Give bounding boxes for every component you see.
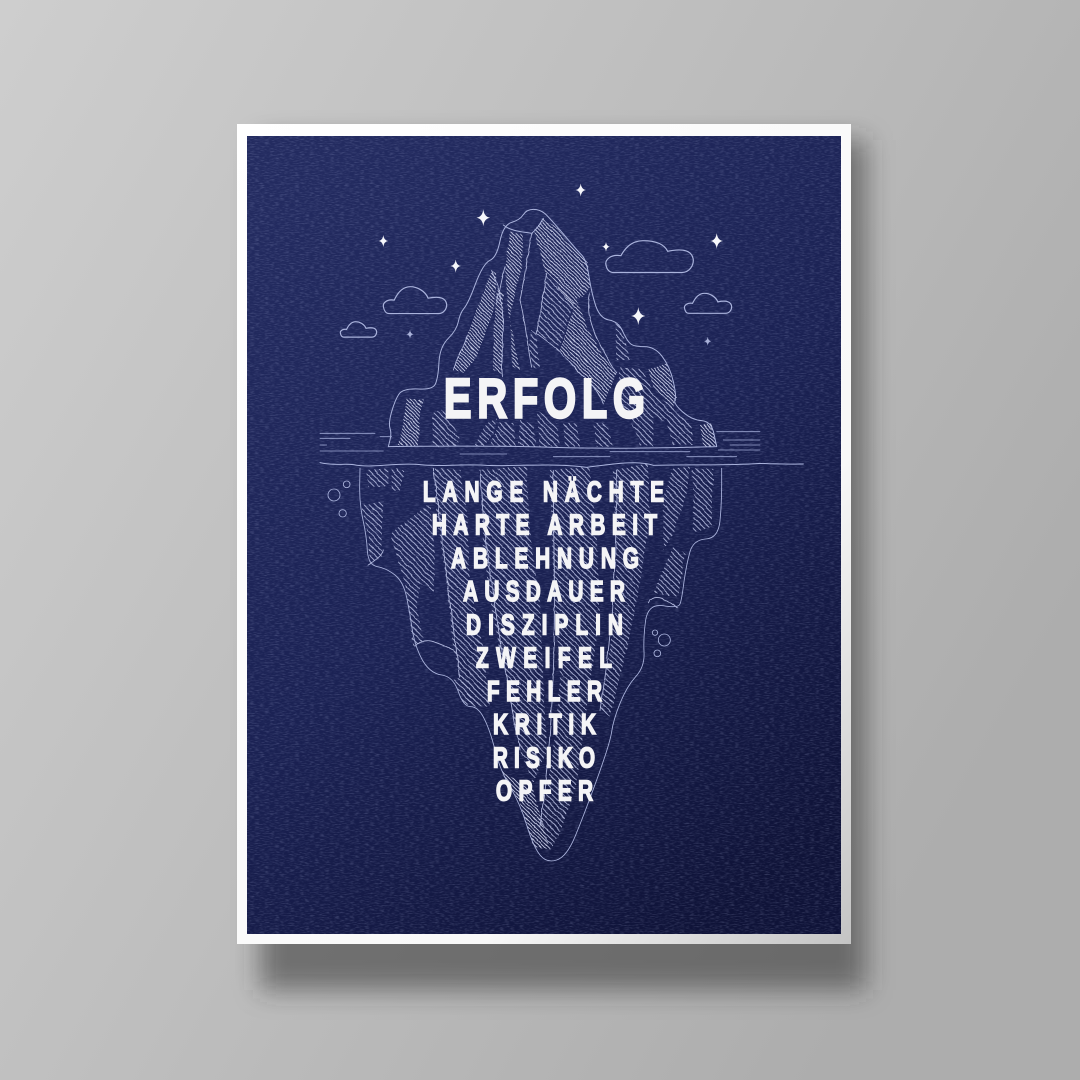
bubbles right [652, 630, 670, 657]
cloud large right [606, 241, 693, 272]
word: ausdauer: AUSDAUER [463, 576, 625, 608]
word: fehler: FEHLER [487, 676, 602, 708]
star 8 dim [406, 330, 414, 339]
star 9 dim [704, 337, 711, 346]
star 1 [476, 209, 490, 226]
word: risiko: RISIKO [493, 742, 595, 774]
iceberg below water [328, 463, 722, 861]
star 7 [631, 307, 646, 325]
water lines [320, 432, 803, 467]
word: kritik: KRITIK [493, 709, 596, 741]
word: opfer: OPFER [496, 775, 593, 808]
iceberg above water [388, 209, 717, 448]
word: ablehnung: ABLEHNUNG [451, 543, 639, 575]
cloud small right [684, 293, 732, 313]
star 4 [450, 260, 461, 272]
star 5 [602, 242, 610, 252]
star 2 [576, 184, 586, 196]
star 3 [378, 235, 388, 247]
word: zweifel: ZWEIFEL [476, 642, 612, 675]
canvas white frame [237, 124, 851, 944]
cloud small left [340, 322, 377, 337]
canvas texture [247, 136, 841, 934]
title: ERFOLG [444, 367, 645, 430]
word: lange naechte: LANGE NÄCHTE [423, 476, 664, 508]
bubbles left [328, 481, 350, 517]
word: disziplin: DISZIPLIN [466, 609, 623, 641]
star 6 [710, 233, 723, 249]
canvas drop shadow [260, 140, 866, 990]
canvas navy panel [247, 136, 841, 934]
word: harte arbeit: HARTE ARBEIT [432, 509, 658, 542]
cloud left [383, 287, 447, 314]
